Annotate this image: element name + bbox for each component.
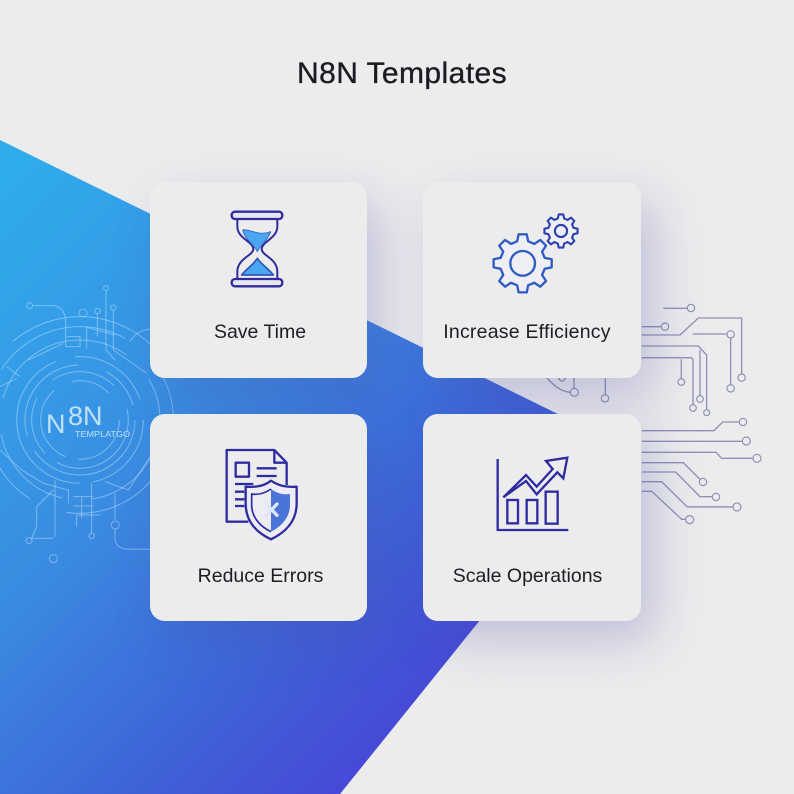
card: reduce errors	[150, 414, 367, 621]
card: increase efficiency	[423, 182, 641, 378]
label: save time: Save Time	[214, 321, 306, 343]
emblem text: N8N: N	[46, 409, 66, 439]
label: reduce errors: Reduce Errors	[198, 565, 323, 587]
circuit emblem: left	[0, 286, 183, 563]
icon: hourglass	[230, 210, 284, 288]
card: scale operations	[423, 414, 641, 621]
title: N8N Templates	[297, 57, 507, 90]
blue diagonal panel	[0, 140, 621, 794]
card: save time	[150, 182, 367, 378]
icon: gears	[492, 213, 579, 294]
icon: document with shield	[226, 448, 298, 540]
label: increase efficiency: Increase Efficiency	[443, 321, 611, 343]
emblem text: templates: TEMPLATGO	[75, 430, 130, 439]
emblem text: N8N: 8N	[68, 401, 103, 431]
circuit traces: right	[547, 304, 761, 524]
icon: growth chart	[496, 456, 569, 532]
label: scale operations: Scale Operations	[453, 565, 602, 587]
